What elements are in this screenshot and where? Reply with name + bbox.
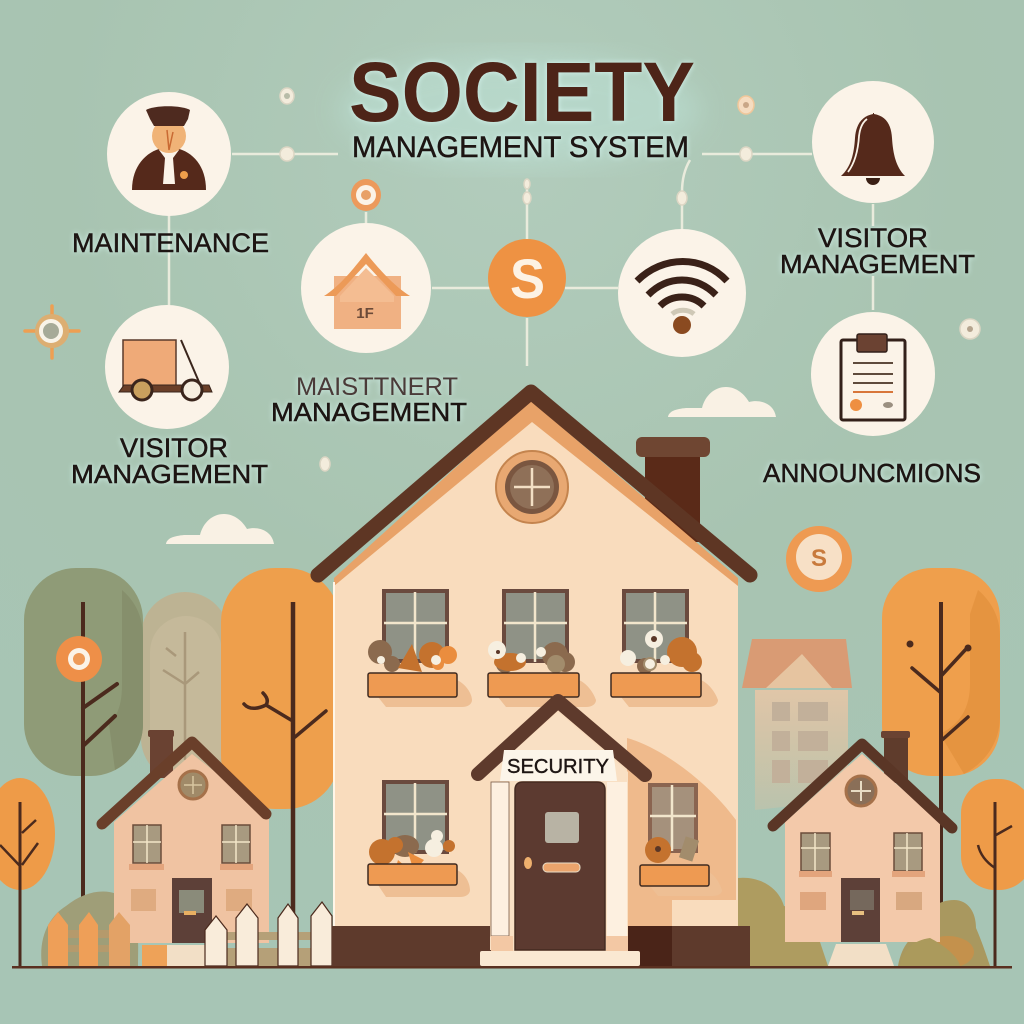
icon: house circle [301, 223, 431, 353]
steps [480, 951, 640, 966]
fence [48, 902, 335, 966]
background house right [742, 639, 852, 810]
icon: house circle: 1F [356, 305, 374, 322]
main house [318, 392, 750, 968]
tree: right large [882, 568, 1000, 945]
house body [334, 400, 738, 968]
title: SOCIETY [349, 45, 695, 139]
connector lines [169, 154, 873, 366]
icon: location marker [25, 306, 79, 358]
tree: left green [24, 568, 143, 910]
icon: wifi [618, 229, 746, 357]
tree: left background [141, 592, 229, 786]
icon: S coin [488, 239, 566, 317]
small house left [102, 730, 269, 967]
window shadows [378, 680, 722, 897]
porch [478, 701, 645, 951]
label: maistinert management [271, 373, 467, 427]
door [515, 782, 605, 950]
windows [384, 591, 696, 852]
sign [500, 750, 617, 781]
tree: left orange [221, 568, 340, 925]
icon: bell [812, 81, 934, 203]
label: maistinert management: MAISTTNERT [296, 373, 458, 401]
roof [318, 392, 750, 575]
base [332, 926, 491, 968]
icon: clipboard [811, 312, 935, 436]
small coin top [351, 179, 381, 211]
flowers [368, 630, 702, 874]
label: visitor management right: MANAGEMENT [780, 249, 975, 279]
sign: SECURITY [507, 756, 609, 778]
icon: truck [105, 305, 229, 429]
tree: far left [0, 778, 55, 966]
label: visitor management left: VISITOR [120, 433, 228, 463]
icon: S coin: S [510, 247, 545, 310]
round attic window [496, 451, 568, 523]
icon: guard [107, 92, 231, 216]
label: visitor management right [780, 223, 975, 279]
tree: far right [961, 779, 1024, 966]
ground line [12, 966, 1012, 968]
label: visitor management left [71, 433, 268, 489]
coin right [786, 526, 852, 592]
cloud: left [166, 514, 274, 544]
label: visitor management left: MANAGEMENT [71, 459, 268, 489]
decorative nodes [280, 88, 980, 471]
coin right: S [811, 545, 827, 572]
label: announcements: ANNOUNCMIONS [763, 458, 981, 488]
label: maistinert management: MANAGEMENT [271, 397, 467, 427]
label: visitor management right: VISITOR [818, 223, 928, 253]
flower boxes [368, 673, 709, 886]
subtitle: MANAGEMENT SYSTEM [352, 131, 689, 164]
small house right [773, 731, 960, 966]
chimney [636, 437, 710, 542]
label: maintenance: MAINTENANCE [72, 228, 269, 258]
cloud: right [668, 387, 776, 417]
bushes [41, 878, 990, 968]
